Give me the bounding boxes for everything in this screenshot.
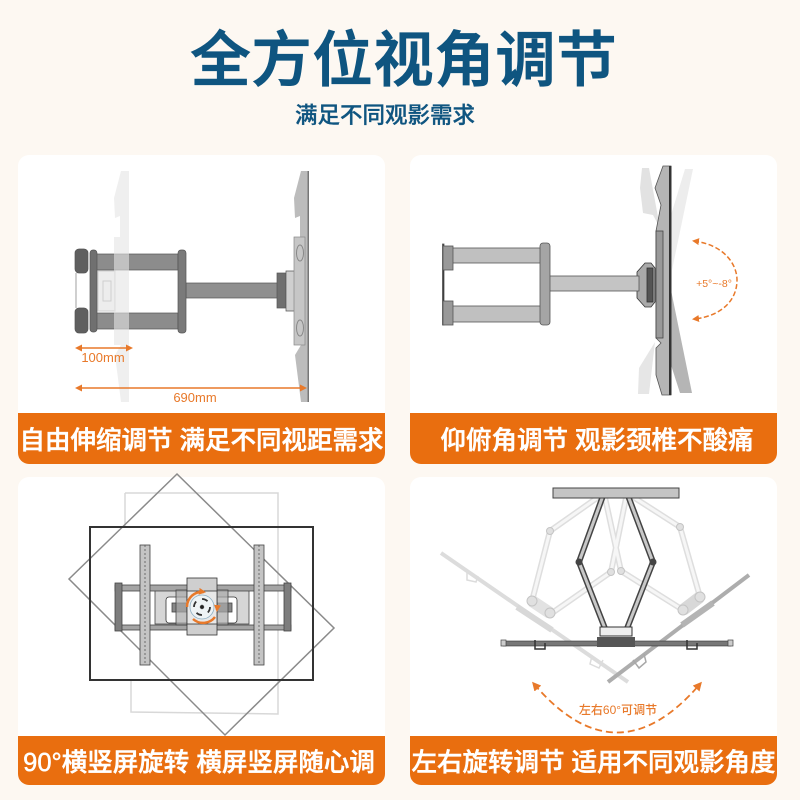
label bar [18,736,385,785]
panel: telescopic adjustment [18,155,385,464]
label bar: 90°横竖屏旋转 横屏竖屏随心调 [23,749,375,777]
swivel arc arrow: 左右60°可调节 [579,702,657,717]
rotation arrows [187,592,217,623]
articulated arm [75,249,295,333]
TV side extended [294,171,309,402]
ghost tilted TVs [638,168,693,394]
ghost bracket [98,271,115,311]
dimension 690mm: 690mm [173,390,217,405]
ghost joints [527,524,705,618]
label bar [18,413,385,464]
ghost TV right [608,575,749,682]
swivel arc arrow [534,684,700,732]
ghost TV left [441,553,628,682]
portrait outline [125,493,278,714]
main arm [579,493,653,631]
label bar [410,736,777,785]
label bar: 左右旋转调节 适用不同观影角度 [411,749,776,777]
label bar [410,413,777,464]
rotated outline [69,474,334,735]
tilt bracket [637,263,655,307]
TV upright [655,166,672,395]
tilt arc arrow [694,241,737,319]
tilt arc arrow: +5°~-8° [696,278,732,290]
label bar: 自由伸缩调节 满足不同视距需求 [19,427,384,455]
panel: rotation [18,474,385,785]
wall plate [553,488,679,498]
panel: swivel [410,477,777,785]
panel: tilt adjustment [410,155,777,464]
landscape outline [90,527,313,680]
subtitle: 满足不同观影需求 [295,103,475,128]
arm [442,243,639,325]
mount plate [115,545,291,665]
dimension 100mm: 100mm [81,350,125,365]
pivots [576,490,656,634]
ghost TV retracted [114,171,129,402]
TV bar [501,627,733,649]
ghost arm positions [532,493,700,613]
label bar: 仰俯角调节 观影颈椎不酸痛 [440,427,754,455]
title: 全方位视角调节 [190,27,618,94]
